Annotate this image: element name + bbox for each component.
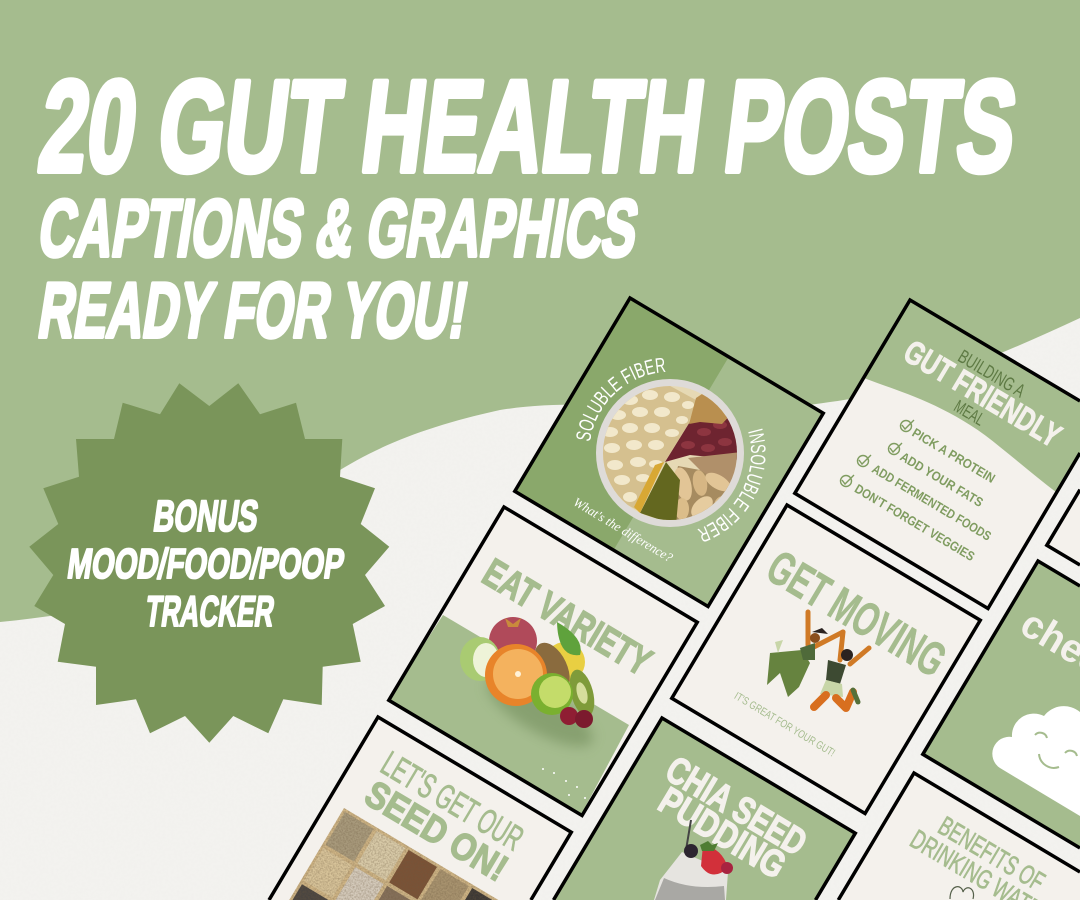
second person: [814, 632, 869, 708]
heading: building a: BUILDING A: [954, 346, 1029, 402]
card base: [672, 505, 980, 813]
card border: [554, 718, 855, 900]
seed tray: [289, 808, 498, 900]
icon: chia pudding jar: [654, 820, 733, 900]
heading: seed on: SEED ON!: [357, 773, 515, 890]
decorative dots: [542, 768, 586, 799]
caption: great for your gut: IT'S GREAT FOR YOUR GUT!: [732, 690, 837, 759]
heading: eat variety: EAT VARIETY: [475, 551, 659, 685]
card border: [515, 298, 823, 606]
checklist: ADD FERMENTED FOODS: [869, 461, 994, 544]
badge text: tracker: TRACKER: [143, 588, 277, 636]
card base: [269, 717, 571, 900]
fruit pile: [460, 617, 602, 759]
first person: [767, 612, 843, 697]
badge text: bonus: BONUS: [151, 492, 261, 541]
card base: [838, 773, 1080, 900]
card: eat variety: [388, 507, 697, 815]
curved label: soluble fiber: SOLUBLE FIBER: [576, 358, 666, 441]
kidney beans: [665, 416, 737, 462]
card border: [389, 507, 697, 815]
card border: [795, 300, 1080, 608]
card: get moving: [672, 505, 980, 813]
darker left half: [515, 298, 729, 550]
card base: [923, 561, 1080, 848]
card border: [923, 561, 1080, 848]
green diagonal panel: [388, 615, 629, 815]
grains: [688, 452, 737, 489]
card: chia seed pudding: [554, 718, 855, 900]
card: cheer cloud: [923, 561, 1080, 848]
badge text: mood food poop: MOOD/FOOD/POOP: [65, 540, 347, 587]
card: partly visible top right: [1047, 490, 1080, 565]
card: benefits of drinking water: [838, 773, 1080, 900]
bowl of fibers: [596, 379, 744, 527]
icon: heart: [950, 887, 974, 899]
walnuts: [689, 394, 728, 424]
card border: [269, 717, 571, 900]
checklist: DON'T FORGET VEGGIES: [852, 481, 978, 564]
oats: [603, 386, 696, 510]
card: soluble vs insoluble fiber: [512, 296, 826, 609]
starburst: [29, 383, 389, 743]
card base: [1047, 490, 1080, 565]
caption: what's the difference: What's the difference?: [571, 494, 676, 565]
heading: chia seed: CHIA SEED: [658, 749, 814, 865]
card base: [554, 718, 855, 900]
subheading line two: READY FOR YOU!: [33, 266, 474, 354]
icon: check marks: [840, 420, 914, 486]
curved label: insoluble fiber: INSOLUBLE FIBER: [698, 428, 766, 542]
subheading line one: CAPTIONS & GRAPHICS: [33, 183, 644, 274]
card: let's get our seed on: [269, 717, 571, 900]
card: building a gut friendly meal: [795, 300, 1080, 608]
mung beans: [640, 462, 680, 525]
checklist: [852, 425, 998, 564]
peanuts: [666, 466, 728, 520]
card border: [838, 773, 1080, 900]
heading: meal: MEAL: [951, 396, 988, 430]
heading: get moving: GET MOVING: [758, 541, 955, 688]
cream wave panel: [795, 378, 1056, 608]
paper wave background: [0, 318, 1080, 900]
chickpeas: [634, 462, 664, 513]
checklist: PICK A PROTEIN: [910, 425, 998, 486]
checklist: ADD YOUR FATS: [898, 449, 986, 510]
icon: smiling cloud: [992, 706, 1080, 816]
card base: [795, 300, 1080, 608]
title: [33, 53, 1024, 354]
card base: [389, 507, 697, 815]
illustration: jumping people: [767, 612, 869, 708]
card border: [1047, 490, 1080, 565]
card base: [515, 298, 823, 606]
bonus badge: [29, 383, 389, 743]
